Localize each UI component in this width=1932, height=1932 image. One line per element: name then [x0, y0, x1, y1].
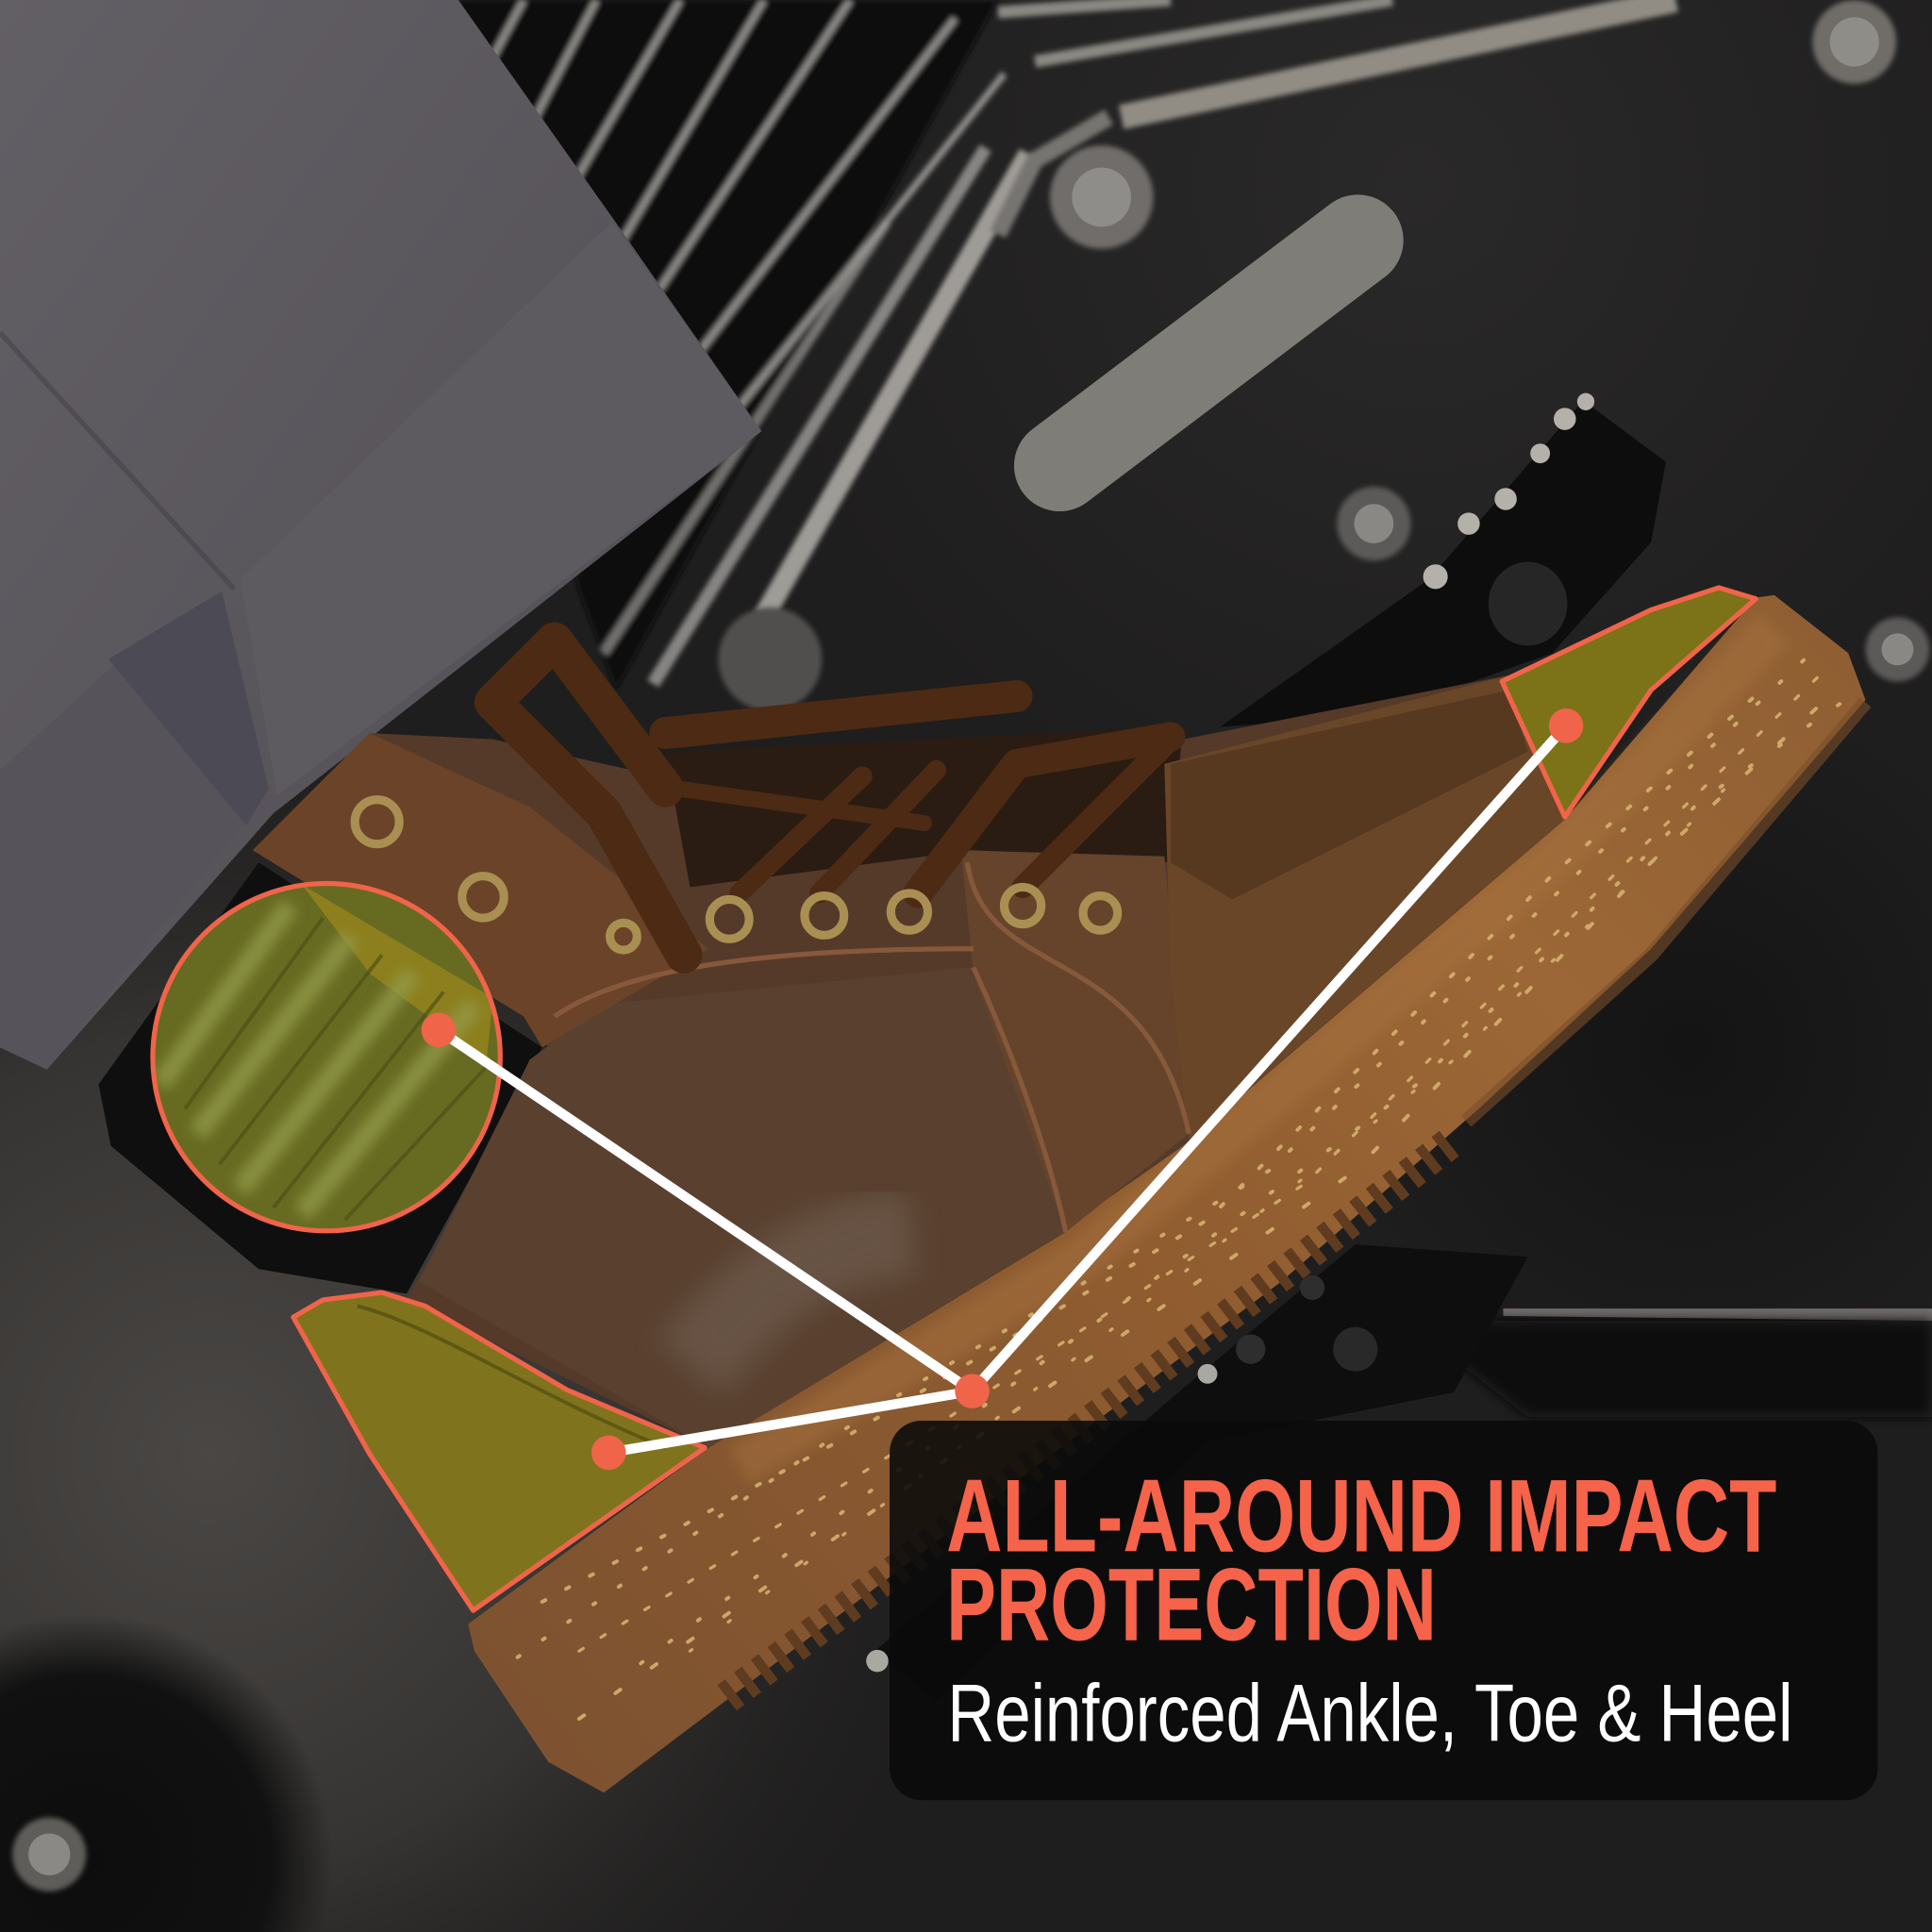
- callout lines: [439, 725, 1566, 1453]
- black outsole rubber behind ankle: [98, 862, 542, 1293]
- laces: [492, 641, 1171, 955]
- lower shifter lever: [866, 1244, 1528, 1700]
- heading: PROTECTION: [946, 1547, 1437, 1662]
- trouser leg: [0, 0, 761, 1070]
- shifter peg: [1220, 393, 1666, 727]
- boot upper leather: [253, 675, 1565, 1448]
- engine metal brackets: [998, 0, 1675, 234]
- text panel: [890, 1421, 1878, 1800]
- cork speckles: [518, 653, 1842, 1719]
- toe highlight: [1502, 588, 1756, 817]
- engine cooling fins: [458, 0, 1029, 690]
- heel highlight: [293, 1292, 705, 1610]
- eyelets: [355, 800, 1118, 950]
- boot sole: [468, 595, 1865, 1792]
- callout dots: [422, 708, 1583, 1470]
- ankle highlight circle: [153, 883, 500, 1231]
- engine metal plate: [1059, 241, 1357, 466]
